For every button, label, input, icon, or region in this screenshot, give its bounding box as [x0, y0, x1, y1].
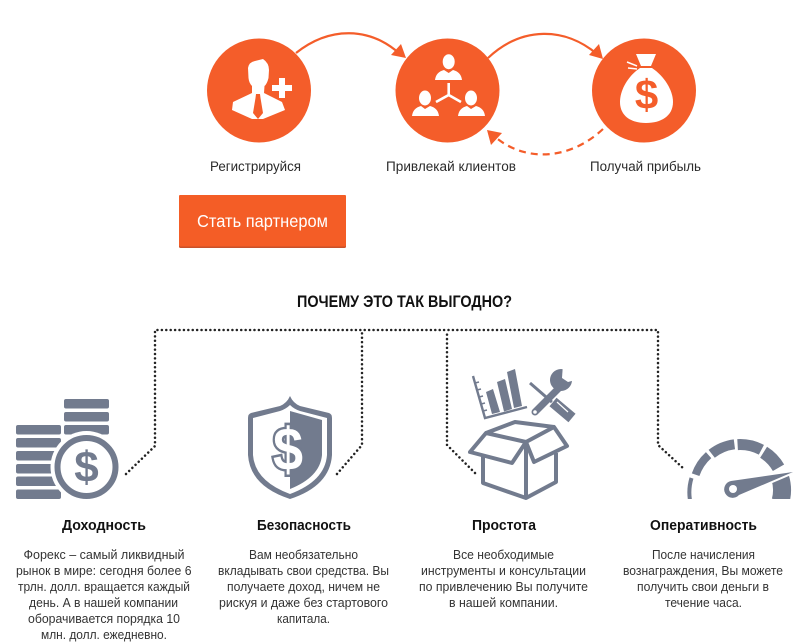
text: safety description: капитала. — [277, 611, 330, 626]
text: safety description: получаете доход, ничем не — [227, 579, 380, 594]
text: safety description: рискуя и даже без стартового — [219, 595, 388, 610]
connector: dotted lines — [126, 330, 683, 474]
icon: coins stack: $ — [74, 443, 99, 492]
text: promptness description — [623, 547, 783, 610]
text: profitability description — [16, 547, 192, 642]
title: promptness: Оперативность — [650, 518, 757, 534]
label: attract clients: Привлекай клиентов — [386, 159, 516, 174]
icon: money bag: $ — [635, 71, 658, 118]
arrow: register to clients — [296, 33, 406, 58]
text: profitability description: рынок в мире: сегодня более 6 — [16, 563, 192, 578]
text: profitability description: млн. долл. ежедневно. — [41, 627, 167, 642]
open box — [470, 422, 567, 498]
heading: why profitable: ПОЧЕМУ ЭТО ТАК ВЫГОДНО? — [297, 293, 512, 311]
text: promptness description: течение часа. — [665, 595, 742, 610]
icon: attract clients network — [396, 38, 500, 142]
arrow: clients to profit — [488, 34, 603, 59]
text: profitability description: день. А в нашей компании — [29, 595, 178, 610]
arrow: dashed return from profit to clients — [487, 129, 603, 154]
chart on box — [473, 369, 527, 418]
text: simplicity description: инструменты и консультации — [421, 563, 586, 578]
text: simplicity description: Все необходимые — [453, 547, 554, 562]
label: get profit: Получай прибыль — [590, 159, 701, 174]
text: safety description: Вам необязательно — [249, 547, 358, 562]
icon: speedometer gauge — [689, 444, 793, 505]
icon: register person with plus — [207, 38, 311, 142]
text: safety description: вкладывать свои средства. Вы — [218, 563, 389, 578]
icon: shield with dollar — [248, 396, 332, 499]
button: become a partner — [179, 195, 346, 248]
text: profitability description: трлн. долл. вращается каждый — [18, 579, 190, 594]
text: promptness description: После начисления — [652, 547, 755, 562]
button: become a partner: Стать партнером — [197, 211, 328, 231]
tools: wrench and screwdriver — [530, 364, 579, 418]
icon: box with chart and tools — [470, 364, 579, 498]
text: profitability description: оборачивается порядка 10 — [28, 611, 180, 626]
text: simplicity description — [419, 547, 588, 610]
title: simplicity: Простота — [472, 518, 537, 534]
label: register: Регистрируйся — [210, 159, 301, 174]
icon: shield with dollar: $ — [273, 416, 303, 484]
icon: coins stack — [16, 399, 122, 503]
text: simplicity description: в нашей компании. — [449, 595, 558, 610]
text: promptness description: получить свои деньги в — [637, 579, 769, 594]
text: profitability description: Форекс – самый ликвидный — [24, 547, 184, 562]
text: promptness description: вознаграждения, Вы можете — [623, 563, 783, 578]
icon: money bag — [592, 38, 696, 142]
text: safety description — [218, 547, 389, 626]
text: simplicity description: по привлечению Вы получите — [419, 579, 588, 594]
title: profitability: Доходность — [62, 518, 146, 534]
title: safety: Безопасность — [257, 518, 351, 534]
